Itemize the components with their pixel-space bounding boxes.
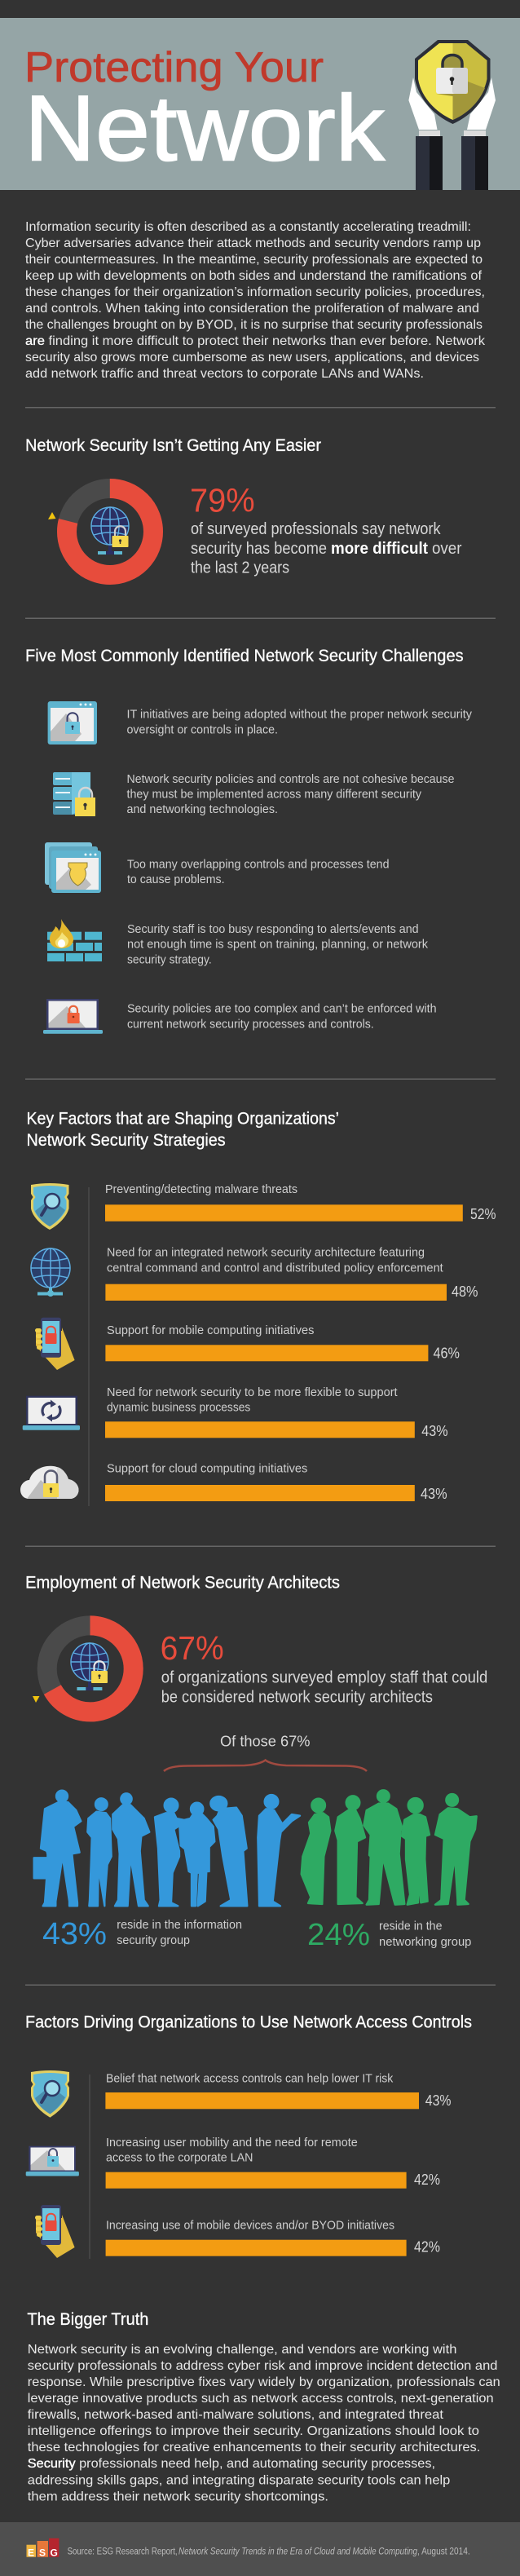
closing paragraph: firewalls, network-based anti-malware solutions, and integrated threat bbox=[28, 2408, 444, 2422]
stat: 79%: the last 2 years bbox=[191, 559, 289, 577]
closing paragraph: them address their network security shortcomings. bbox=[28, 2490, 328, 2504]
panel: challenges list bbox=[43, 701, 472, 1034]
text: challenge 3: to cause problems. bbox=[127, 873, 225, 886]
bar row: lower IT risk bbox=[105, 2071, 452, 2109]
stat: 43% information security group bbox=[42, 1917, 242, 1951]
closing paragraph: these technologies for creative enhancements to their security architectures. bbox=[28, 2441, 480, 2454]
stat: 24% networking group: 24% bbox=[307, 1918, 370, 1952]
bar row: lower IT risk: 43% bbox=[425, 2092, 452, 2109]
text: challenge 1: oversight or controls in place. bbox=[127, 722, 278, 736]
bar row: cloud computing bbox=[105, 1461, 447, 1502]
bar row: mobile devices bbox=[106, 2218, 440, 2256]
brace bbox=[164, 1760, 367, 1771]
icon: ESG logo: E bbox=[28, 2547, 34, 2559]
source note: Source: ESG Research Report, bbox=[68, 2547, 178, 2557]
heading: access controls: Factors Driving Organizations to Use Network Access Controls bbox=[25, 2013, 472, 2032]
heading: employment: Employment of Network Security Architects bbox=[25, 1573, 340, 1592]
bar row: integrated architecture bbox=[105, 1246, 478, 1301]
icon: shield with magnifier bbox=[31, 2070, 69, 2118]
text: challenge 2: they must be implemented across many different security bbox=[127, 788, 421, 802]
bar row: mobile computing: Support for mobile computing initiatives bbox=[107, 1323, 314, 1337]
intro paragraph: security also grows more cumbersome as new users, applications, and devices bbox=[25, 351, 479, 365]
closing paragraph: intelligence offerings to improve their security. Organizations should look to bbox=[28, 2424, 479, 2438]
chart: 79% donut bbox=[48, 488, 153, 575]
bar row: user mobility: access to the corporate LAN bbox=[106, 2151, 253, 2165]
text: challenge 4: not enough time is spent on training, planning, or network bbox=[127, 938, 428, 952]
intro paragraph: Information security is often described as a constantly accelerating treadmill: bbox=[25, 220, 471, 234]
stat: 43% information security group: reside in the information bbox=[117, 1918, 242, 1932]
text: challenge 5: current network security processes and controls. bbox=[127, 1018, 374, 1032]
bar row: malware: Preventing/detecting malware threats bbox=[105, 1182, 297, 1196]
intro paragraph: keep up with developments on both sides and understand the ramifications of bbox=[25, 269, 483, 283]
intro paragraph: Cyber adversaries advance their attack methods and security vendors ramp up bbox=[25, 236, 481, 250]
text: challenge 1 bbox=[127, 708, 472, 736]
stat: 79%: more difficult bbox=[331, 539, 428, 558]
text: challenge 2: Network security policies and controls are not cohesive because bbox=[127, 772, 455, 786]
bar row: flexible: 43% bbox=[421, 1422, 448, 1439]
icon: globe with padlock bbox=[91, 507, 129, 555]
title: Network bbox=[24, 77, 386, 181]
stat: 79%: security has become bbox=[191, 539, 327, 558]
bar row: mobile computing: 46% bbox=[434, 1344, 460, 1361]
text: challenge 2 bbox=[127, 772, 455, 816]
intro paragraph: the challenges brought on by BYOD, it is no surprise that security professionals bbox=[25, 318, 483, 332]
text: challenge 1: IT initiatives are being adopted without the proper network security bbox=[127, 708, 472, 722]
bar row: lower IT risk: Belief that network access controls can help lower IT risk bbox=[106, 2071, 394, 2085]
intro paragraph: their countermeasures. In the meantime, security professionals are expected to bbox=[25, 253, 483, 267]
text: challenge 3 bbox=[127, 857, 390, 886]
chart: 67% donut bbox=[33, 1625, 134, 1712]
icon: browser window with lock bbox=[48, 701, 97, 745]
stat: 67%: 67% bbox=[161, 1629, 224, 1667]
heading: key factors bbox=[26, 1109, 339, 1150]
icon: hand holding phone bbox=[35, 2205, 75, 2258]
chart: key factors bars bbox=[20, 1182, 496, 1506]
closing paragraph: response. While prescriptive fixes vary widely by organization, professionals can bbox=[28, 2375, 500, 2389]
bar row: user mobility: Increasing user mobility and the need for remote bbox=[106, 2136, 358, 2150]
chart: access control bars bbox=[26, 2070, 451, 2259]
bar row: flexible: Need for network security to be more flexible to support bbox=[107, 1385, 398, 1399]
bar row: integrated architecture: central command and control and distributed policy enforcement bbox=[107, 1261, 443, 1275]
header banner bbox=[0, 18, 520, 190]
icon: ESG logo: G bbox=[51, 2547, 58, 2559]
intro paragraph: these changes for their organization’s information security policies, procedures, bbox=[25, 285, 485, 299]
bar row: mobile devices: Increasing use of mobile devices and/or BYOD initiatives bbox=[106, 2218, 394, 2232]
footer bbox=[0, 2522, 520, 2576]
icon: servers with lock bbox=[53, 772, 95, 816]
icon: globe with padlock bbox=[71, 1643, 108, 1690]
icon: ESG logo bbox=[26, 2538, 59, 2559]
bar row: user mobility: 42% bbox=[414, 2171, 440, 2188]
icon: laptop with blue lock bbox=[26, 2146, 79, 2176]
heading: key factors: Key Factors that are Shaping Organizations’ bbox=[26, 1109, 339, 1128]
source note bbox=[68, 2547, 470, 2557]
closing paragraph: Security professionals need help, and automating security processes, bbox=[28, 2457, 435, 2471]
bar row: flexible bbox=[105, 1385, 448, 1439]
bar row: malware: 52% bbox=[470, 1205, 496, 1222]
stat: 79%: 79% bbox=[190, 482, 255, 519]
label: of those 67%: Of those 67% bbox=[220, 1734, 310, 1750]
text: challenge 4 bbox=[127, 922, 428, 967]
icon: globe on network base bbox=[31, 1248, 70, 1297]
icon: hand holding phone bbox=[35, 1318, 75, 1370]
text: challenge 4: Security staff is too busy responding to alerts/events and bbox=[127, 922, 419, 936]
intro paragraph: and controls. When taking into consideration the proliferation of malware and bbox=[25, 302, 479, 316]
heading: key factors: Network Security Strategies bbox=[26, 1131, 226, 1150]
stat: 79%: over bbox=[432, 539, 462, 558]
stat: 24% networking group: reside in the bbox=[379, 1920, 442, 1933]
heading: five challenges: Five Most Commonly Identified Network Security Challenges bbox=[25, 647, 464, 665]
text: challenge 4: security strategy. bbox=[127, 953, 212, 967]
title: Protecting Your bbox=[24, 43, 324, 91]
stat: 79%: of surveyed professionals say network bbox=[191, 519, 441, 538]
bar row: cloud computing: 43% bbox=[421, 1485, 447, 1502]
closing paragraph: addressing skills gaps, and integrating disparate security tools can help bbox=[28, 2474, 450, 2488]
people: blue group bbox=[34, 1791, 300, 1906]
text: challenge 3: Too many overlapping controls and processes tend bbox=[127, 857, 390, 871]
heading: network security: Network Security Isn’t Getting Any Easier bbox=[25, 436, 321, 455]
intro paragraph bbox=[25, 220, 486, 381]
closing paragraph: Network security is an evolving challenge, and vendors are working with bbox=[28, 2343, 456, 2357]
text: challenge 5: Security policies are too complex and can’t be enforced with bbox=[127, 1002, 437, 1016]
bar row: user mobility bbox=[106, 2136, 440, 2189]
icon: firewall with flame bbox=[47, 919, 102, 961]
stat: 67% bbox=[161, 1629, 487, 1707]
stat: 24% networking group: networking group bbox=[379, 1935, 471, 1949]
stat: 79% bbox=[190, 482, 462, 577]
stat: 43% information security group: 43% bbox=[42, 1917, 107, 1951]
people: green group bbox=[302, 1790, 477, 1905]
icon: ESG logo: S bbox=[39, 2547, 46, 2559]
bar row: integrated architecture: Need for an integrated network security architecture featuring bbox=[107, 1246, 425, 1260]
intro paragraph: add network traffic and threat vectors to corporate LANs and WANs. bbox=[25, 367, 424, 381]
closing paragraph bbox=[28, 2343, 500, 2504]
bar row: mobile devices: 42% bbox=[414, 2238, 440, 2256]
icon: laptop with red lock bbox=[43, 999, 103, 1034]
bar row: integrated architecture: 48% bbox=[452, 1283, 478, 1300]
source note: , August 2014. bbox=[417, 2547, 470, 2557]
stat: 67%: of organizations surveyed employ staff that could bbox=[161, 1668, 487, 1686]
text: challenge 2: and networking technologies. bbox=[127, 802, 278, 816]
icon: laptop with sync arrows bbox=[23, 1396, 80, 1430]
bar row: mobile computing bbox=[105, 1323, 460, 1361]
bar row: malware bbox=[105, 1182, 496, 1222]
closing paragraph: leverage innovative products such as network access controls, next-generation bbox=[28, 2392, 494, 2406]
icon: stacked windows with shield bbox=[45, 842, 101, 893]
source note: Network Security Trends in the Era of Cloud and Mobile Computing bbox=[178, 2547, 418, 2557]
bar row: cloud computing: Support for cloud computing initiatives bbox=[107, 1461, 307, 1475]
icon: cloud with lock bbox=[20, 1466, 78, 1499]
heading: the bigger truth: The Bigger Truth bbox=[27, 2310, 148, 2329]
stat: 67%: be considered network security architects bbox=[161, 1688, 433, 1707]
stat: 24% networking group bbox=[307, 1918, 471, 1952]
text: challenge 5 bbox=[127, 1002, 437, 1032]
bar row: flexible: dynamic business processes bbox=[107, 1401, 250, 1415]
icon: hands holding shield with padlock bbox=[408, 40, 496, 190]
intro paragraph: are finding it more difficult to protect their networks than ever before. Network bbox=[25, 334, 486, 348]
stat: 43% information security group: security group bbox=[117, 1933, 190, 1947]
icon: shield with magnifier bbox=[31, 1183, 68, 1230]
closing paragraph: security professionals to address cyber risk and improve incident detection and bbox=[28, 2359, 498, 2373]
